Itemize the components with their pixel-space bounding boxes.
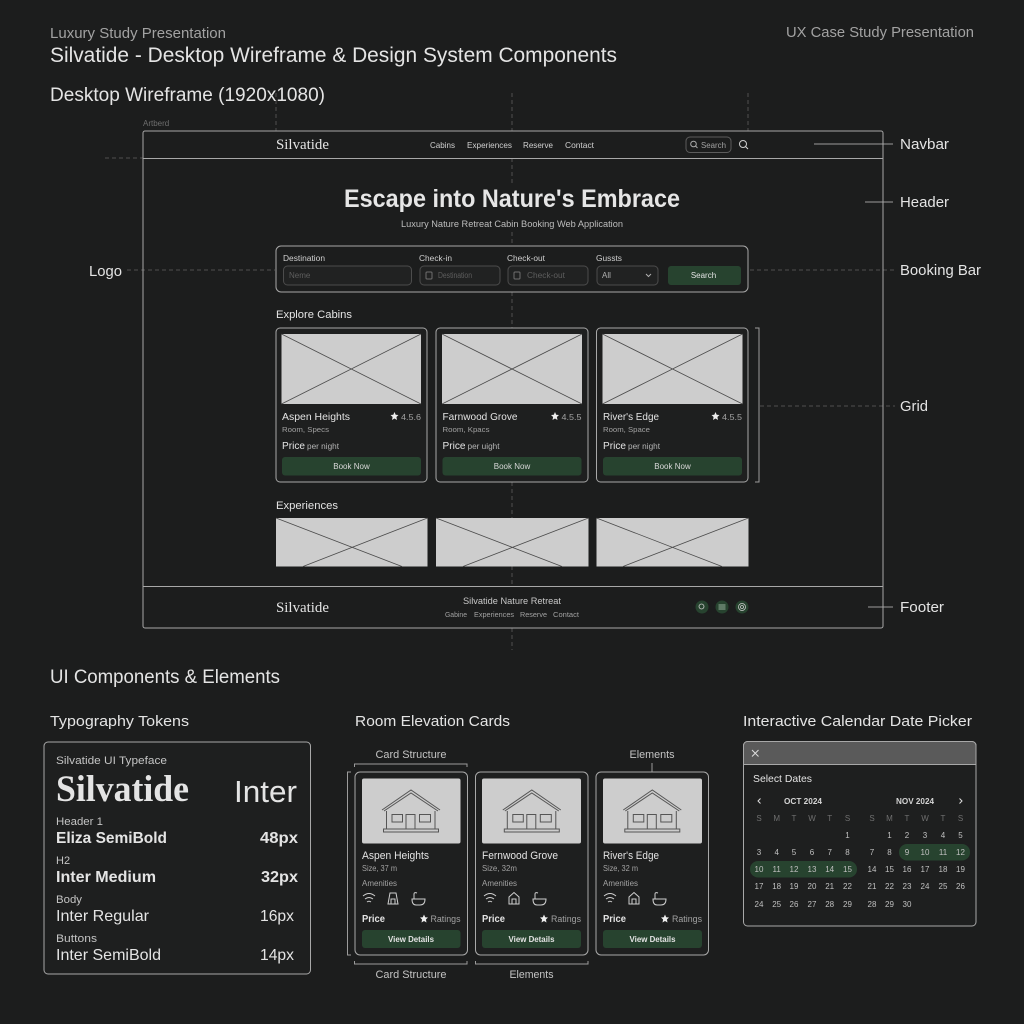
booking bar: Gussts xyxy=(596,254,622,263)
annotations: room card brackets xyxy=(348,749,675,981)
room card: River's Edge xyxy=(596,772,708,955)
hero subtitle: Luxury Nature Retreat Cabin Booking Web Application xyxy=(401,219,623,229)
footer: Contact xyxy=(553,612,579,619)
october dates: 24 xyxy=(755,900,764,909)
heading: calendar date picker: Interactive Calendar Date Picker xyxy=(743,713,972,730)
november dates: 23 xyxy=(903,882,912,891)
cabin card: Farnwood Grove: 4.5.5 xyxy=(562,413,582,422)
page header: UX Case Study Presentation xyxy=(786,24,974,41)
navbar: Search xyxy=(701,141,726,150)
booking bar: Check-out xyxy=(507,254,546,263)
november dates: 1 xyxy=(887,831,892,840)
panel: typography tokens: Silvatide UI Typeface xyxy=(56,755,167,767)
artboard label: Artberd xyxy=(143,119,169,128)
annotations: room card brackets: Elements xyxy=(630,749,675,761)
room card: Aspen Heights xyxy=(355,772,468,955)
hero heading: Escape into Nature's Embrace xyxy=(344,185,680,213)
panel: calendar date picker: OCT 2024 xyxy=(784,797,823,806)
footer: Silvatide Nature Retreat xyxy=(463,596,562,606)
section heading: UI components: UI Components & Elements xyxy=(50,667,280,688)
november dates: 14 xyxy=(868,865,877,874)
october dates: 29 xyxy=(843,900,852,909)
weekday headers: W xyxy=(808,814,816,823)
cabin card: Farnwood Grove: Room, Kpacs xyxy=(442,425,490,434)
weekday headers: M xyxy=(773,814,780,823)
panel: calendar date picker: NOV 2024 xyxy=(896,797,935,806)
november dates: 11 xyxy=(939,848,948,857)
november dates: 19 xyxy=(956,865,965,874)
heading: typography tokens: Typography Tokens xyxy=(50,713,189,730)
november dates: 5 xyxy=(958,831,963,840)
panel: typography tokens: 16px xyxy=(260,908,294,925)
room card: River's Edge: Ratings xyxy=(672,914,702,924)
november dates: 16 xyxy=(903,865,912,874)
room card: Fernwood Grove: Amenities xyxy=(482,879,517,888)
room card: River's Edge: Amenities xyxy=(603,879,638,888)
cabin card: River's Edge: River's Edge xyxy=(603,411,659,423)
november dates: 3 xyxy=(923,831,928,840)
navbar: Experiences xyxy=(467,140,512,150)
november dates xyxy=(868,831,965,909)
october dates: 25 xyxy=(772,900,782,909)
amenity icons xyxy=(484,892,546,905)
booking bar: Check-out xyxy=(527,271,566,280)
november dates: 2 xyxy=(905,831,910,840)
booking bar xyxy=(276,246,748,292)
room card: Aspen Heights: Ratings xyxy=(430,914,461,924)
navbar: Silvatide xyxy=(276,137,329,153)
cabin card: River's Edge: 4.5.5 xyxy=(722,413,743,422)
november dates: 9 xyxy=(905,848,910,857)
panel: typography tokens: H2 xyxy=(56,855,70,867)
panel: calendar date picker: Select Dates xyxy=(753,773,812,785)
annotations: room card brackets: Card Structure xyxy=(376,749,446,761)
november dates: 15 xyxy=(885,865,894,874)
heading: experiences: Experiences xyxy=(276,500,338,512)
room card: Fernwood Grove: Price xyxy=(482,914,505,925)
weekday headers: T xyxy=(941,814,946,823)
panel: typography tokens: 48px xyxy=(260,830,298,847)
room card: Fernwood Grove: View Details xyxy=(508,935,555,944)
panel: calendar date picker xyxy=(744,742,976,926)
october dates: 28 xyxy=(825,900,835,909)
november dates: 7 xyxy=(870,848,875,857)
heading: explore cabins: Explore Cabins xyxy=(276,309,353,321)
footer: Reserve xyxy=(520,612,547,619)
booking bar: All xyxy=(602,271,611,280)
annotation: Footer: Footer xyxy=(900,599,944,616)
weekday headers: T xyxy=(792,814,797,823)
panel: typography tokens: Silvatide xyxy=(56,769,189,810)
weekday headers: S xyxy=(869,814,875,823)
booking bar: Destination xyxy=(283,254,325,263)
room card: Aspen Heights: Size, 37 m xyxy=(362,864,397,873)
october dates: 10 xyxy=(755,865,764,874)
october dates: 6 xyxy=(810,848,815,857)
panel: typography tokens: Eliza SemiBold xyxy=(56,830,167,847)
october dates: 4 xyxy=(774,848,779,857)
november dates: 10 xyxy=(921,848,930,857)
heading: room elevation cards: Room Elevation Cards xyxy=(355,713,510,730)
october dates: 5 xyxy=(792,848,797,857)
page header: Silvatide - Desktop Wireframe & Design System Components xyxy=(50,44,617,67)
footer xyxy=(143,586,883,619)
booking bar: Search xyxy=(691,271,716,280)
cabin card: River's Edge: Price xyxy=(603,441,626,452)
section heading: desktop wireframe: Desktop Wireframe (1920x1080) xyxy=(50,85,325,106)
cabin card: Aspen Heights: per night xyxy=(307,442,340,451)
cabin card: Aspen Heights xyxy=(276,328,427,482)
october dates: 26 xyxy=(790,900,799,909)
annotations: room card brackets: Elements xyxy=(510,969,554,981)
weekday headers: S xyxy=(756,814,762,823)
room card: River's Edge: Size, 32 m xyxy=(603,864,638,873)
booking bar: Neme xyxy=(289,271,311,280)
october dates: 8 xyxy=(845,848,850,857)
panel: typography tokens: Body xyxy=(56,894,83,906)
weekday headers: S xyxy=(845,814,850,823)
october dates: 13 xyxy=(808,865,817,874)
room card: Fernwood Grove: Ratings xyxy=(551,914,581,924)
icon: house xyxy=(503,790,561,832)
november dates: 26 xyxy=(956,882,965,891)
panel: typography tokens: Inter Regular xyxy=(56,908,150,925)
room card: River's Edge: View Details xyxy=(630,935,676,944)
panel: typography tokens: Inter xyxy=(234,774,297,809)
panel: typography tokens: 32px xyxy=(261,869,298,886)
cabin card: River's Edge: Room, Space xyxy=(603,425,650,434)
november dates: 29 xyxy=(885,900,894,909)
november dates: 28 xyxy=(868,900,877,909)
october dates: 11 xyxy=(773,865,781,874)
october dates: 12 xyxy=(790,865,799,874)
room card: Fernwood Grove xyxy=(476,772,588,955)
page header xyxy=(50,24,974,67)
october dates: 15 xyxy=(843,865,852,874)
navbar: Contact xyxy=(565,140,595,150)
october dates: 22 xyxy=(843,882,852,891)
navbar: Cabins xyxy=(430,140,455,150)
november dates: 18 xyxy=(939,865,948,874)
room card: Aspen Heights: Aspen Heights xyxy=(362,850,429,862)
november dates: 21 xyxy=(868,882,877,891)
room card: Fernwood Grove: Fernwood Grove xyxy=(482,850,558,862)
cabin card: Farnwood Grove: Price xyxy=(442,441,466,452)
october dates xyxy=(755,831,852,909)
annotation: Logo: Logo xyxy=(89,263,122,280)
panel: typography tokens: 14px xyxy=(260,947,294,964)
october dates: 17 xyxy=(755,882,764,891)
icon: house xyxy=(382,790,440,832)
cabin card: Aspen Heights: Book Now xyxy=(333,462,370,471)
cabin card: River's Edge: Book Now xyxy=(654,462,691,471)
november dates: 17 xyxy=(921,865,930,874)
november dates: 25 xyxy=(939,882,948,891)
room card: Aspen Heights: View Details xyxy=(388,935,435,944)
cabin card: Farnwood Grove: per uight xyxy=(468,442,500,451)
room card: Fernwood Grove: Size, 32m xyxy=(482,864,517,873)
annotation: Header: Header xyxy=(900,194,949,211)
cabin card: River's Edge xyxy=(596,328,748,482)
page header: Luxury Study Presentation xyxy=(50,25,226,42)
navbar xyxy=(143,137,883,158)
october dates: 7 xyxy=(827,848,832,857)
amenity icons xyxy=(363,893,425,905)
cabin card: Aspen Heights: 4.5.6 xyxy=(401,413,422,422)
cabin card: River's Edge: per night xyxy=(628,442,661,451)
navbar: Reserve xyxy=(523,140,553,150)
room card: River's Edge: River's Edge xyxy=(603,850,659,862)
annotation: Grid: Grid xyxy=(900,398,928,415)
october dates: 1 xyxy=(845,831,850,840)
panel: typography tokens: Header 1 xyxy=(56,816,103,828)
october dates: 19 xyxy=(790,882,799,891)
room card: River's Edge: Price xyxy=(603,914,626,925)
panel: typography tokens: Buttons xyxy=(56,933,98,945)
cabin card: Aspen Heights: Aspen Heights xyxy=(282,411,350,423)
panel: desktop wireframe artboard xyxy=(143,131,883,628)
october dates: 3 xyxy=(757,848,762,857)
cabin card: Aspen Heights: Price xyxy=(282,441,305,452)
panel: typography tokens: Inter SemiBold xyxy=(56,947,161,964)
cabin card: Farnwood Grove: Book Now xyxy=(494,462,530,471)
weekday headers: T xyxy=(905,814,910,823)
annotation: Navbar: Navbar xyxy=(900,136,949,153)
weekday headers: T xyxy=(827,814,832,823)
cabin card: Aspen Heights: Room, Specs xyxy=(282,425,329,434)
november dates: 24 xyxy=(921,882,930,891)
november dates: 12 xyxy=(956,848,965,857)
october dates: 18 xyxy=(772,882,782,891)
october dates: 21 xyxy=(825,882,835,891)
amenity icons xyxy=(604,892,666,905)
weekday headers: M xyxy=(886,814,893,823)
october dates: 14 xyxy=(825,865,835,874)
november dates: 30 xyxy=(903,900,912,909)
cabin card: Farnwood Grove: Farnwood Grove xyxy=(442,411,518,423)
panel: typography tokens xyxy=(44,742,310,974)
room card: Aspen Heights: Price xyxy=(362,914,385,925)
november dates: 8 xyxy=(887,848,892,857)
booking bar: Check-in xyxy=(419,254,452,263)
annotations: room card brackets: Card Structure xyxy=(376,969,446,981)
panel: typography tokens: Inter Medium xyxy=(56,869,156,886)
october dates: 20 xyxy=(808,882,817,891)
grid bracket xyxy=(755,328,759,482)
weekday headers: S xyxy=(958,814,963,823)
booking bar: Destination xyxy=(438,271,472,280)
footer: Silvatide xyxy=(276,600,329,616)
weekday headers xyxy=(756,814,963,823)
annotation: Booking Bar: Booking Bar xyxy=(900,262,981,279)
icon: house xyxy=(623,790,681,832)
weekday headers: W xyxy=(921,814,929,823)
selected range highlights xyxy=(750,844,970,878)
footer: Experiences xyxy=(474,612,515,619)
experience placeholders xyxy=(276,518,748,566)
cabin card: Farnwood Grove xyxy=(436,328,588,482)
room card: Aspen Heights: Amenities xyxy=(362,879,397,888)
november dates: 22 xyxy=(885,882,894,891)
october dates: 27 xyxy=(808,900,817,909)
november dates: 4 xyxy=(941,831,946,840)
footer: Gabine xyxy=(445,612,467,619)
